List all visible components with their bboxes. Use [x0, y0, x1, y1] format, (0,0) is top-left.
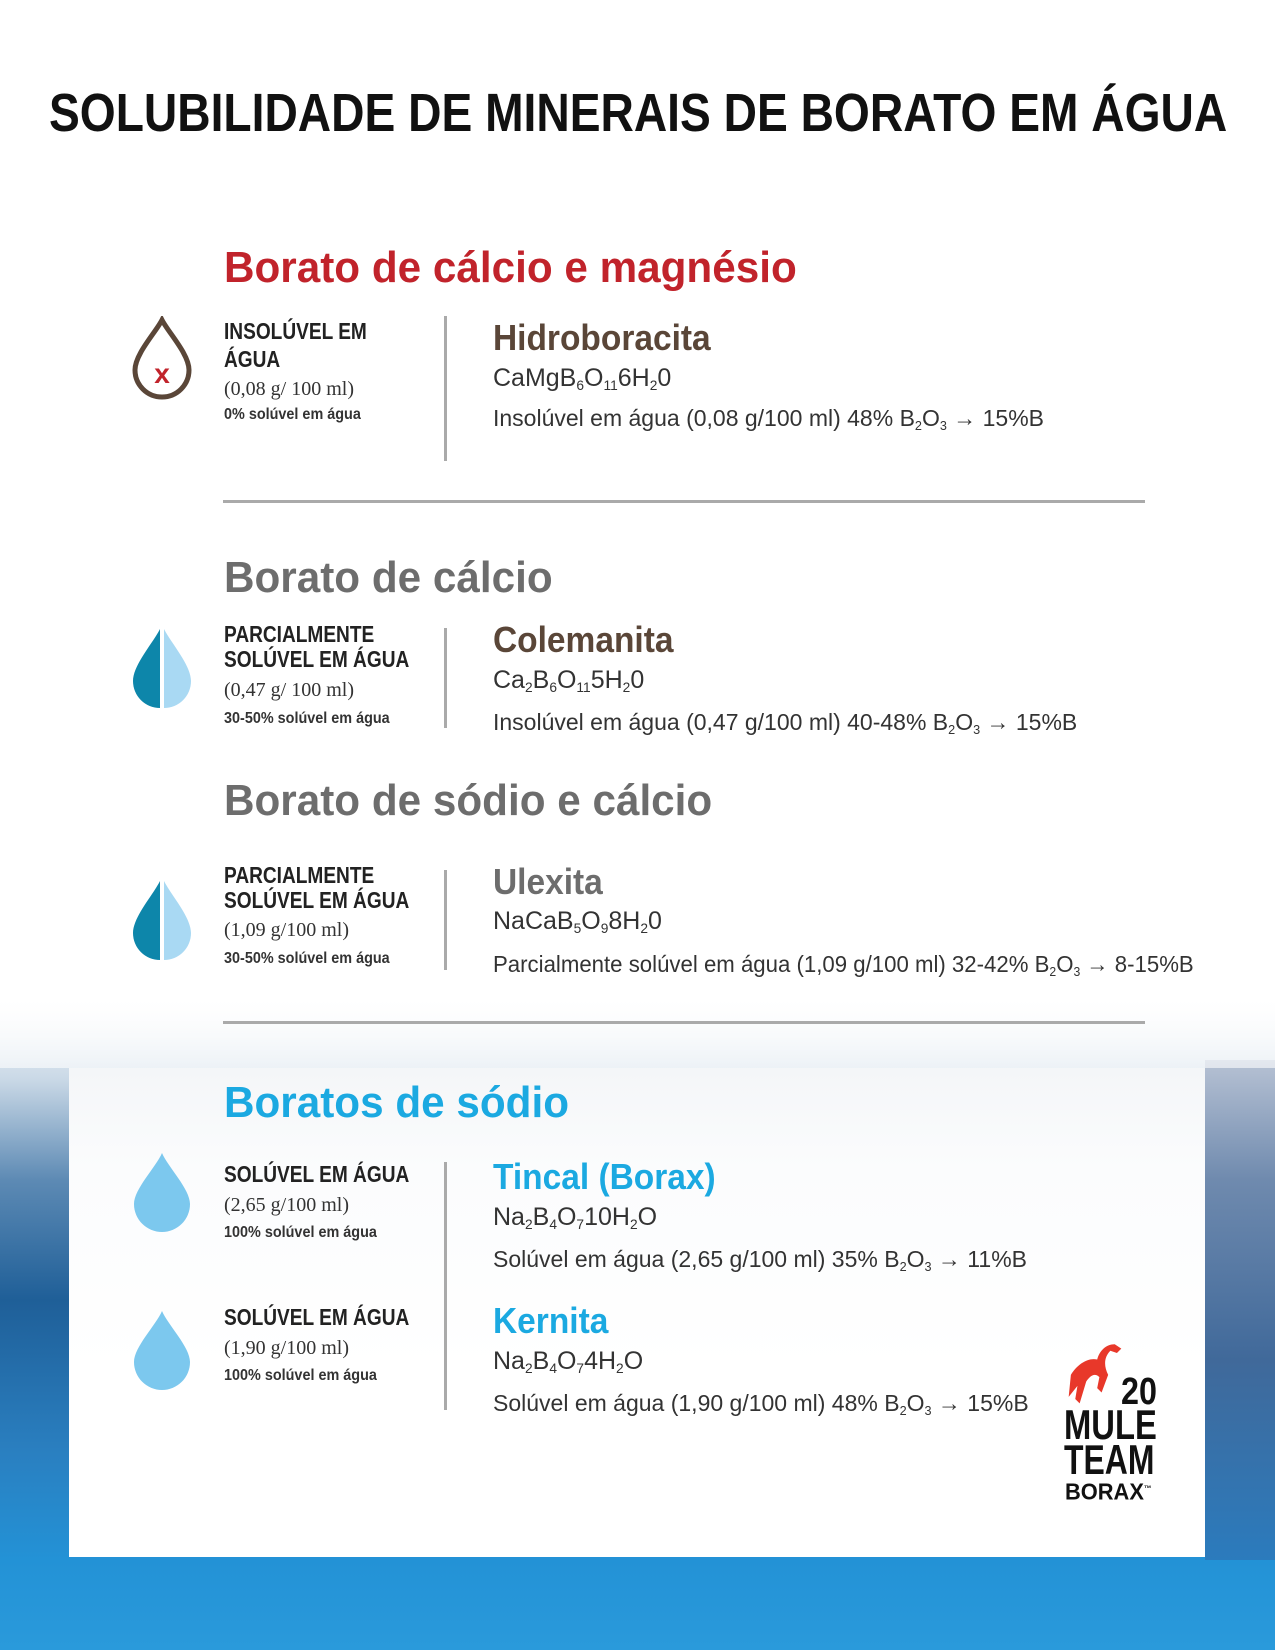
left text row 1: [224, 318, 367, 423]
logo: 20 Mule Team Borax: TEAM: [1064, 1436, 1154, 1483]
left text row 4: (2,65 g/100 ml): [224, 1194, 349, 1216]
left text row 2: [224, 621, 409, 727]
icon: half drop 2: [133, 881, 191, 960]
heading: calcium: Borato de cálcio: [224, 553, 553, 602]
Tincal: Tincal (Borax): [493, 1156, 716, 1197]
left text row 4: 100% solúvel em água: [224, 1224, 377, 1241]
Kernita: [493, 1300, 1029, 1418]
left text row 4: SOLÚVEL EM ÁGUA: [224, 1161, 409, 1187]
icon: drop 1: [134, 1153, 190, 1232]
icon: drop 2: [134, 1311, 190, 1390]
left text row 2: (0,47 g/ 100 ml): [224, 679, 354, 701]
left text row 5: [224, 1304, 409, 1384]
Ulexita: Ulexita: [493, 861, 603, 902]
left text row 3: [224, 862, 409, 967]
Kernita: Kernita: [493, 1300, 608, 1341]
icon: insoluble drop: x: [154, 358, 170, 389]
Hidroboracita: [493, 317, 1044, 433]
Tincal: Solúvel em água (2,65 g/100 ml) 35% B2O3 → 11%B: [493, 1246, 1027, 1274]
title: SOLUBILIDADE DE MINERAIS DE BORATO EM ÁGUA: [49, 83, 1227, 143]
Ulexita: Parcialmente solúvel em água (1,09 g/100 ml) 32-42% B2O3 → 8-15%B: [493, 951, 1194, 979]
left text row 5: (1,90 g/100 ml): [224, 1337, 349, 1359]
logo: 20 Mule Team Borax: [1064, 1344, 1157, 1505]
left text row 2: PARCIALMENTE: [224, 621, 374, 647]
logo: 20 Mule Team Borax: MULE: [1064, 1401, 1157, 1448]
left text row 1: 0% solúvel em água: [224, 406, 361, 423]
left text row 3: SOLÚVEL EM ÁGUA: [224, 887, 409, 913]
icon: insoluble drop: [132, 316, 192, 400]
right water side: [1205, 1060, 1275, 1560]
heading: sodium calcium: Borato de sódio e cálcio: [224, 776, 712, 825]
left text row 3: (1,09 g/100 ml): [224, 919, 349, 941]
Hidroboracita: Insolúvel em água (0,08 g/100 ml) 48% B2O3 → 15%B: [493, 405, 1044, 433]
left text row 2: 30-50% solúvel em água: [224, 710, 390, 727]
Tincal: Na2B4O710H2O: [493, 1203, 657, 1232]
left text row 3: 30-50% solúvel em água: [224, 950, 390, 967]
Ulexita: [493, 861, 1194, 979]
heading: sodium: Boratos de sódio: [224, 1078, 569, 1127]
Hidroboracita: CaMgB6O116H20: [493, 364, 671, 393]
white panel: [69, 1068, 1205, 1557]
left text row 5: 100% solúvel em água: [224, 1367, 377, 1384]
icon: half drop: [133, 629, 191, 708]
logo: 20 Mule Team Borax: BORAX™: [1065, 1479, 1152, 1505]
left text row 1: INSOLÚVEL EM: [224, 318, 367, 344]
Kernita: Solúvel em água (1,90 g/100 ml) 48% B2O3 → 15%B: [493, 1390, 1029, 1418]
icon: mule: [1068, 1344, 1122, 1404]
Colemanita: Insolúvel em água (0,47 g/100 ml) 40-48% B2O3 → 15%B: [493, 709, 1077, 737]
left text row 1: (0,08 g/ 100 ml): [224, 378, 354, 400]
Colemanita: Ca2B6O115H20: [493, 666, 644, 695]
heading: calcium magnesium: Borato de cálcio e magnésio: [224, 243, 797, 292]
Colemanita: [493, 619, 1077, 737]
Ulexita: NaCaB5O98H20: [493, 907, 662, 936]
logo: 20 Mule Team Borax: 20: [1121, 1371, 1157, 1413]
left text row 2: SOLÚVEL EM ÁGUA: [224, 646, 409, 672]
Hidroboracita: Hidroboracita: [493, 317, 711, 358]
left text row 1: ÁGUA: [224, 346, 280, 372]
left text row 4: [224, 1161, 409, 1241]
Kernita: Na2B4O74H2O: [493, 1347, 643, 1376]
left text row 3: PARCIALMENTE: [224, 862, 374, 888]
Tincal: [493, 1156, 1027, 1274]
left text row 5: SOLÚVEL EM ÁGUA: [224, 1304, 409, 1330]
Colemanita: Colemanita: [493, 619, 673, 660]
